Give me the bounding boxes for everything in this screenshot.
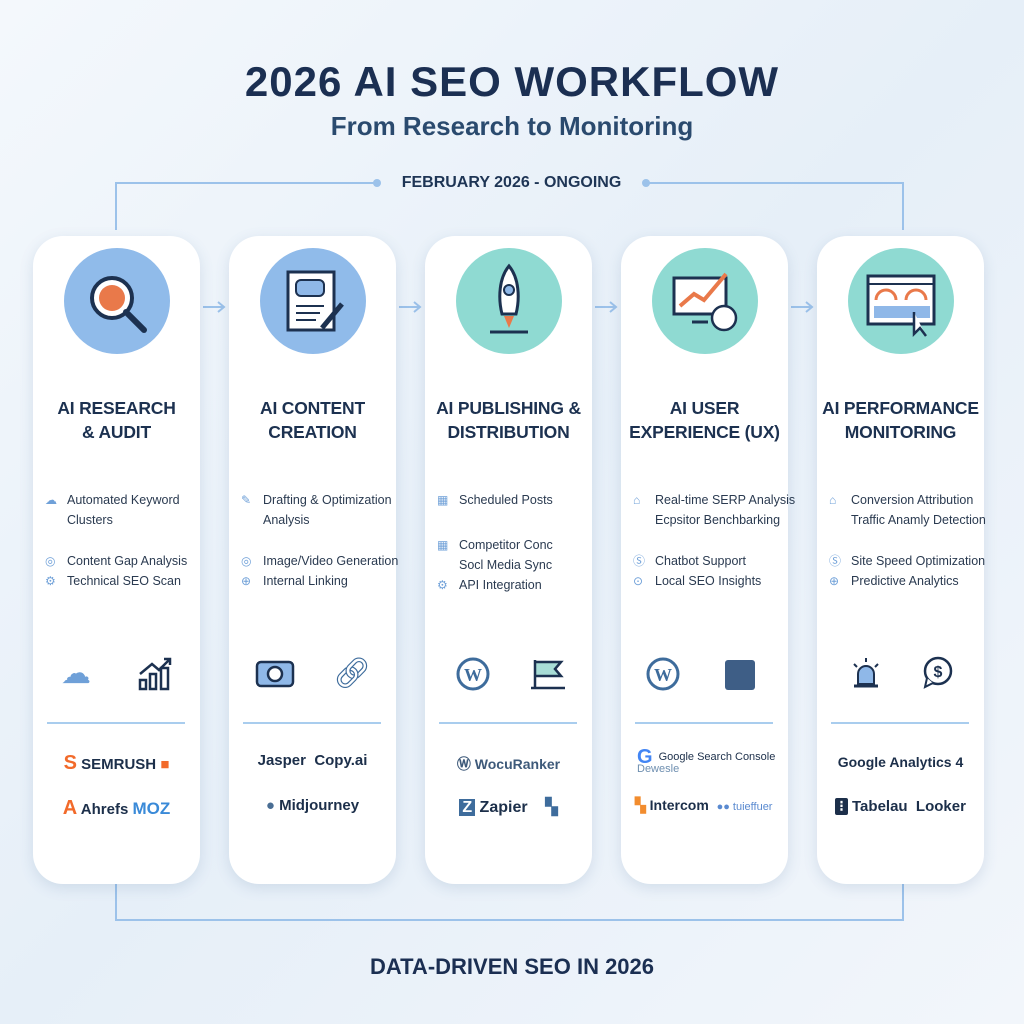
- panel: monitoring: Predictive Analytics: [851, 574, 959, 588]
- heading: MONITORING: [845, 422, 956, 442]
- heading: CREATION: [268, 422, 357, 442]
- bullets: ▦: [437, 493, 448, 507]
- tools: Google Analytics 4: [838, 754, 963, 770]
- bullets: ☁: [45, 493, 57, 507]
- heading: [629, 398, 780, 442]
- panel: research: Content Gap Analysis: [67, 554, 187, 568]
- panel: ux: Ⓢ: [633, 554, 645, 568]
- panel: publishing: [425, 236, 592, 884]
- footer: DATA-DRIVEN SEO IN 2026: [370, 954, 654, 979]
- icon: dashboard: [848, 248, 954, 354]
- bullets: Automated Keyword: [67, 493, 180, 507]
- panel: publishing: API Integration: [459, 578, 542, 592]
- panel: content: [229, 236, 396, 884]
- panel: content: ⊕: [241, 574, 251, 588]
- icon: robot document: [260, 248, 366, 354]
- panel: publishing: Socl Media Sync: [459, 558, 552, 572]
- panel: ux: ⊙: [633, 574, 643, 588]
- panel: monitoring: Site Speed Optimization: [851, 554, 985, 568]
- panel: content: ◎: [241, 554, 251, 568]
- heading: EXPERIENCE (UX): [629, 422, 780, 442]
- date label: FEBRUARY 2026 - ONGOING: [402, 174, 621, 191]
- icons: [256, 660, 294, 688]
- bullets: Scheduled Posts: [459, 493, 553, 507]
- bullets: [829, 493, 986, 527]
- panel: monitoring: Ⓢ: [829, 554, 841, 568]
- bullets: ⌂: [829, 493, 836, 507]
- title: 2026 AI SEO WORKFLOW: [245, 58, 779, 105]
- panel: research: [33, 236, 200, 884]
- icon: chart monitor: [652, 248, 758, 354]
- heading: AI CONTENT: [260, 398, 365, 418]
- tools: Ⓦ WocuRanker: [457, 756, 560, 772]
- tools: [637, 746, 775, 775]
- heading: [260, 398, 365, 442]
- heading: AI RESEARCH: [57, 398, 176, 418]
- panel: monitoring: ⊕: [829, 574, 839, 588]
- tools: S SEMRUSH ■: [64, 752, 169, 774]
- heading: [436, 398, 581, 442]
- heading: [57, 398, 176, 442]
- panel: ux: [621, 236, 788, 884]
- bullets: ✎: [241, 493, 251, 507]
- bullets: Clusters: [67, 513, 113, 527]
- heading: AI PERFORMANCE: [822, 398, 979, 418]
- icon: rocket: [456, 248, 562, 354]
- bullets: Analysis: [263, 513, 310, 527]
- icon: brain magnifier: [64, 248, 170, 354]
- tools: Dewesle: [637, 763, 679, 775]
- bullets: Ecpsitor Benchbarking: [655, 513, 780, 527]
- panel: research: ◎: [45, 554, 55, 568]
- panel: publishing: Z Zapier ▚: [462, 799, 558, 816]
- panel: ux: Chatbot Support: [655, 554, 746, 568]
- panel: publishing: ⚙: [437, 578, 448, 592]
- bullets: Drafting & Optimization: [263, 493, 392, 507]
- bullets: [633, 493, 795, 527]
- icons: ☁: [61, 657, 91, 690]
- tools: G: [637, 746, 653, 768]
- panel: content: Internal Linking: [263, 574, 348, 588]
- heading: [822, 398, 979, 442]
- panel: content: 🔗︎: [333, 657, 371, 690]
- bullets: [45, 493, 180, 527]
- panel: monitoring: ⁝ Tabelau Looker: [839, 798, 966, 815]
- panel: publishing: ▦: [437, 538, 448, 552]
- panel: ux: ▚ Intercom ●● tuieffuer: [635, 797, 772, 813]
- icons: W: [654, 665, 672, 685]
- heading: & AUDIT: [82, 422, 151, 442]
- tools: Google Search Console: [659, 751, 775, 763]
- tools: Jasper Copy.ai: [258, 752, 367, 769]
- bullets: ⌂: [633, 493, 640, 507]
- bullets: Traffic Anamly Detection: [851, 513, 986, 527]
- icons: [456, 658, 490, 690]
- panel: monitoring: $: [934, 664, 943, 681]
- icons: W: [464, 665, 482, 685]
- heading: AI PUBLISHING &: [436, 398, 581, 418]
- heading: DISTRIBUTION: [447, 422, 570, 442]
- subtitle: From Research to Monitoring: [331, 111, 693, 141]
- panel: content: ● Midjourney: [266, 797, 359, 814]
- panel: research: Technical SEO Scan: [67, 574, 181, 588]
- panel: publishing: Competitor Conc: [459, 538, 553, 552]
- panel: research: A Ahrefs MOZ: [63, 797, 170, 819]
- panel: ux: Local SEO Insights: [655, 574, 761, 588]
- icons: [853, 658, 879, 688]
- panel: content: Image/Video Generation: [263, 554, 398, 568]
- bullets: [241, 493, 392, 527]
- heading: AI USER: [670, 398, 739, 418]
- bullets: Conversion Attribution: [851, 493, 973, 507]
- panel: research: ⚙: [45, 574, 56, 588]
- panel: monitoring: [817, 236, 984, 884]
- bullets: Real-time SERP Analysis: [655, 493, 795, 507]
- icons: [646, 658, 680, 690]
